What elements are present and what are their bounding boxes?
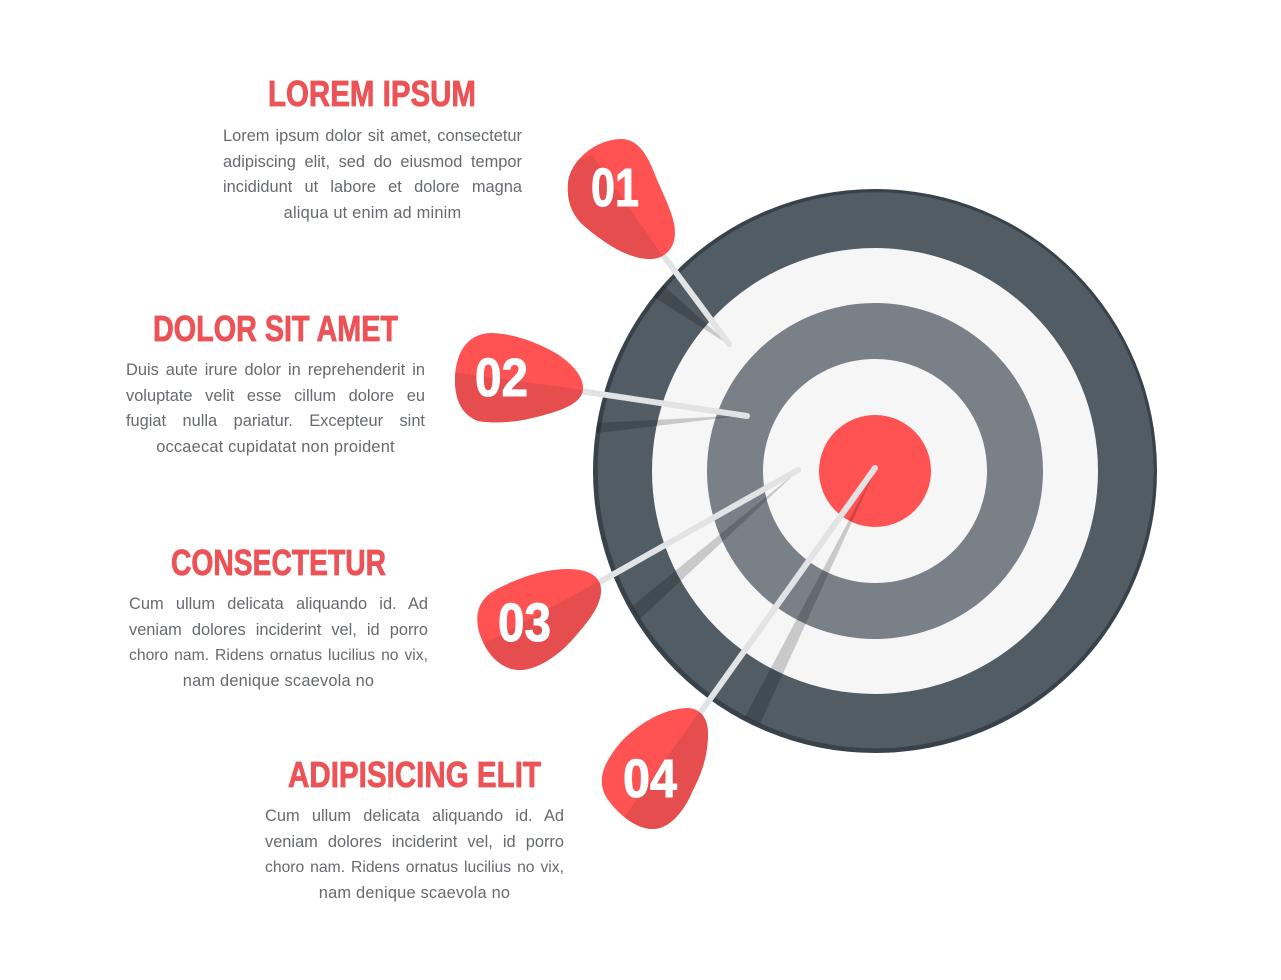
body text: lorem ipsum xyxy=(223,127,522,222)
body text: consectetur: nam denique scaevola no xyxy=(183,672,374,690)
text block: dolor sit amet xyxy=(126,308,425,456)
target and darts illustration xyxy=(455,139,1157,829)
body text: lorem ipsum: adipiscing elit, sed do eiusmod tempor xyxy=(223,153,522,171)
body text: dolor sit amet: Duis aute irure dolor in reprehenderit in xyxy=(126,361,425,379)
body text: consectetur: veniam dolores inciderint vel, id porro xyxy=(129,621,428,639)
text block: lorem ipsum xyxy=(223,73,522,222)
heading: consectetur: CONSECTETUR xyxy=(171,542,386,583)
dart 04: 04 xyxy=(623,749,677,809)
target board xyxy=(593,189,1157,753)
body text: lorem ipsum: aliqua ut enim ad minim xyxy=(284,204,461,222)
dart 01 xyxy=(550,139,729,344)
body text: adipisicing elit xyxy=(265,807,564,902)
heading: adipisicing elit: ADIPISICING ELIT xyxy=(288,754,541,795)
heading: lorem ipsum: LOREM IPSUM xyxy=(268,73,476,114)
body text: lorem ipsum: Lorem ipsum dolor sit amet, consectetur xyxy=(223,127,522,145)
body text: consectetur xyxy=(129,595,428,690)
body text: consectetur: Cum ullum delicata aliquando id. Ad xyxy=(129,595,428,613)
text block: consectetur xyxy=(129,542,428,690)
body text: dolor sit amet xyxy=(126,361,425,456)
body text: consectetur: choro nam. Ridens ornatus lucilius no vix, xyxy=(129,647,428,664)
dart 03: 03 xyxy=(498,593,551,653)
dart 04 xyxy=(602,468,875,835)
dart 01: 01 xyxy=(591,158,639,218)
dart 02: 02 xyxy=(475,348,528,408)
body text: adipisicing elit: choro nam. Ridens ornatus lucilius no vix, xyxy=(265,859,564,876)
body text: dolor sit amet: occaecat cupidatat non proident xyxy=(156,438,395,456)
body text: lorem ipsum: incididunt ut labore et dolore magna xyxy=(223,178,522,196)
body text: adipisicing elit: nam denique scaevola no xyxy=(319,884,510,902)
body text: adipisicing elit: veniam dolores inciderint vel, id porro xyxy=(265,833,564,851)
dart shadows xyxy=(596,283,876,724)
dart 03 xyxy=(477,470,798,680)
text block: adipisicing elit xyxy=(265,754,564,902)
heading: dolor sit amet: DOLOR SIT AMET xyxy=(153,308,398,349)
body text: adipisicing elit: Cum ullum delicata aliquando id. Ad xyxy=(265,807,564,825)
body text: dolor sit amet: voluptate velit esse cillum dolore eu xyxy=(126,387,425,405)
dart 02 xyxy=(450,333,747,430)
body text: dolor sit amet: fugiat nulla pariatur. Excepteur sint xyxy=(126,412,425,430)
